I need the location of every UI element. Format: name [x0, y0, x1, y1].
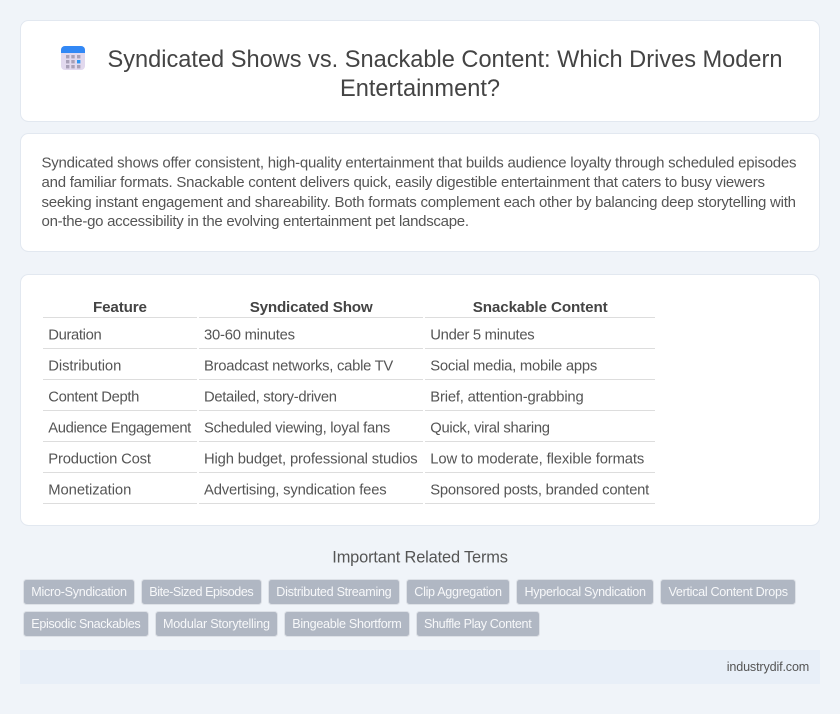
tag: Modular Storytelling: Modular Storytelling: [163, 617, 270, 631]
table header: Feature: [93, 299, 147, 316]
table row: production cost: High budget, professional studios: [204, 451, 418, 467]
title: [108, 47, 782, 102]
table row: distribution: Broadcast networks, cable TV: [204, 358, 393, 374]
footer: [20, 650, 820, 684]
tag: Micro-Syndication: Micro-Syndication: [31, 585, 127, 599]
table row: audience engagement: Audience Engagement: [48, 420, 191, 436]
title: Entertainment?: [340, 76, 500, 102]
text block: introduction: on-the-go accessibility in the evolving entertainment pet landscape.: [42, 213, 469, 230]
table row: production cost: [48, 451, 644, 467]
table row: monetization: Monetization: [48, 482, 131, 498]
panel: comparison table: [20, 274, 820, 526]
table row: audience engagement: Scheduled viewing, loyal fans: [204, 420, 390, 436]
table row: monetization: [48, 482, 649, 498]
table row: content depth: [48, 389, 584, 405]
panel: header: [20, 20, 820, 122]
title: Syndicated Shows vs. Snackable Content: Which Drives Modern: [108, 47, 782, 73]
table row: content depth: Content Depth: [48, 389, 139, 405]
table row: monetization: Advertising, syndication fees: [204, 482, 387, 498]
tag: Episodic Snackables: Episodic Snackables: [31, 617, 141, 631]
table row: duration: 30-60 minutes: [204, 327, 295, 343]
tag: Shuffle Play Content: [416, 612, 540, 636]
icon: calendar: [61, 46, 85, 70]
tag: Bingeable Shortform: [284, 612, 410, 636]
table row: monetization: Sponsored posts, branded content: [430, 482, 649, 498]
table row: production cost: Low to moderate, flexible formats: [430, 451, 644, 467]
tag: Clip Aggregation: [406, 580, 510, 604]
table row: production cost: Production Cost: [48, 451, 151, 467]
text block: introduction: Syndicated shows offer consistent, high-quality entertainment that builds audience loyalty through scheduled episodes: [42, 154, 796, 172]
table row: distribution: [48, 358, 597, 374]
tag: Shuffle Play Content: Shuffle Play Content: [424, 617, 532, 631]
table row: duration: [48, 327, 535, 343]
table header: Syndicated Show: [250, 299, 373, 316]
tag: Hyperlocal Syndication: Hyperlocal Syndication: [524, 585, 646, 599]
tag: Vertical Content Drops: [660, 580, 796, 604]
table row: content depth: Brief, attention-grabbing: [430, 389, 584, 405]
text block: introduction: seeking instant engagement and shareability. Both formats complement each other by balancing deep storytelling with: [42, 194, 796, 211]
text block: introduction: and familiar formats. Snackable content delivers quick, easily digestible entertainment that caters to busy viewers: [42, 174, 765, 191]
table header: Snackable Content: [473, 299, 608, 316]
table row: audience engagement: [48, 420, 550, 436]
tag: Clip Aggregation: Clip Aggregation: [414, 585, 502, 599]
table row: audience engagement: Quick, viral sharing: [430, 420, 550, 436]
tag: Episodic Snackables: [24, 612, 148, 636]
tag: Modular Storytelling: [156, 612, 278, 636]
table row: content depth: Detailed, story-driven: [204, 389, 337, 405]
table row: distribution: Social media, mobile apps: [430, 358, 597, 374]
tag: Distributed Streaming: [268, 580, 400, 604]
tag: Bite-Sized Episodes: Bite-Sized Episodes: [149, 585, 254, 599]
tag: Vertical Content Drops: Vertical Content Drops: [668, 585, 788, 599]
tags: related terms: [24, 580, 796, 636]
footer: industrydif.com: [727, 660, 809, 674]
tag: Bite-Sized Episodes: [142, 580, 262, 604]
tag: Micro-Syndication: [24, 580, 134, 604]
tag: Distributed Streaming: Distributed Streaming: [276, 585, 392, 599]
text block: introduction: [42, 154, 796, 230]
table row: duration: Duration: [48, 327, 102, 343]
panel: introduction: [20, 134, 820, 252]
table header: [93, 299, 608, 316]
table row: distribution: Distribution: [48, 358, 121, 374]
tag: Hyperlocal Syndication: [516, 580, 654, 604]
table row: duration: Under 5 minutes: [430, 327, 535, 343]
tag: Bingeable Shortform: Bingeable Shortform: [292, 617, 402, 631]
heading: important related terms: Important Related Terms: [332, 548, 508, 566]
